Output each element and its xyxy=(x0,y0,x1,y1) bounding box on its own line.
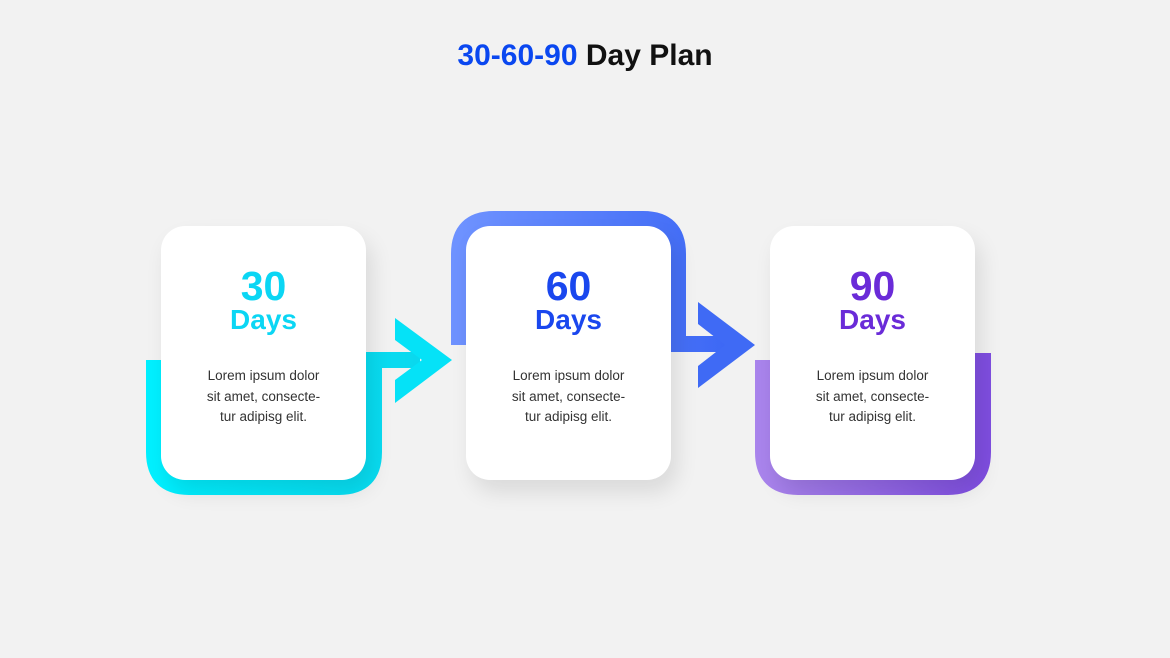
card 3 text: Days xyxy=(839,304,906,335)
card 1 xyxy=(161,226,366,480)
connector 2 xyxy=(459,219,755,388)
card 3 text: tur adipisg elit. xyxy=(829,409,916,424)
card 2 text: Days xyxy=(535,304,602,335)
card 1 text: sit amet, consecte- xyxy=(207,388,320,404)
title: 30-60-90 Day Plan xyxy=(457,39,713,72)
card 1 text: Days xyxy=(230,304,297,335)
card 1 text: tur adipisg elit. xyxy=(220,409,307,424)
card 3 text xyxy=(816,263,929,424)
card 3 text: Lorem ipsum dolor xyxy=(817,368,928,383)
card 1 text: 30 xyxy=(241,263,286,309)
card 3 text: sit amet, consecte- xyxy=(816,388,929,404)
card 2 text: 60 xyxy=(546,263,591,309)
card 3 xyxy=(770,226,975,480)
connector 1 xyxy=(154,318,452,487)
card 3 text: 90 xyxy=(850,263,895,309)
card 2 text: sit amet, consecte- xyxy=(512,388,625,404)
card 2 text xyxy=(512,263,625,424)
card 1 text: Lorem ipsum dolor xyxy=(208,368,319,383)
card 2 xyxy=(466,226,671,480)
card 2 text: Lorem ipsum dolor xyxy=(513,368,624,383)
connector 3 xyxy=(763,353,983,487)
card 2 text: tur adipisg elit. xyxy=(525,409,612,424)
card 1 text xyxy=(207,263,320,424)
